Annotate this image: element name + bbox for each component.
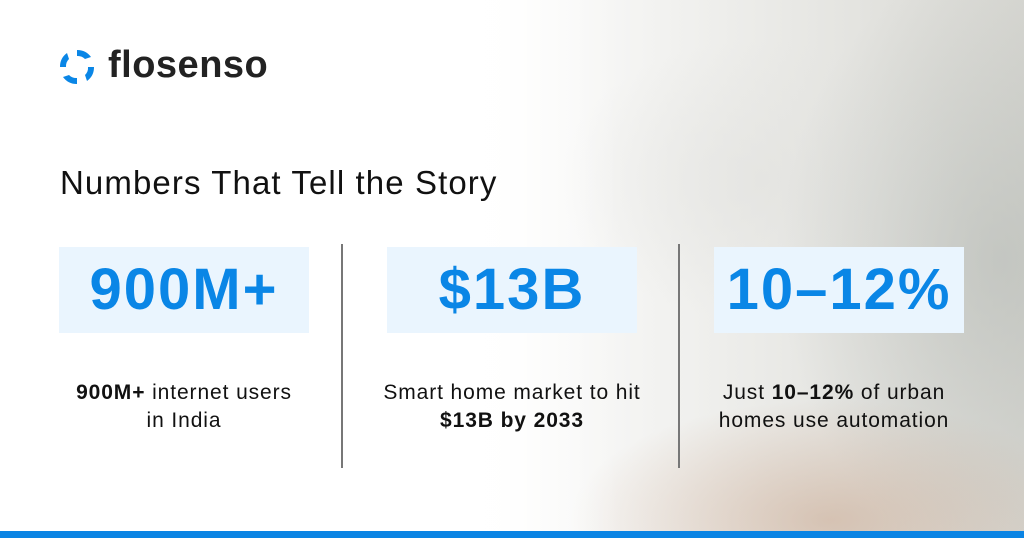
stat 3: [714, 247, 964, 432]
title: Numbers That Tell the Story: [60, 164, 498, 201]
text: Just 10–12% of urban: [723, 381, 945, 404]
text: 10–12%: [727, 257, 951, 322]
icon: logo mark: [60, 50, 94, 84]
text: $13B: [439, 257, 585, 322]
logo: flosenso: [108, 44, 268, 86]
stat 2: [383, 247, 641, 432]
text: 900M+: [90, 257, 278, 322]
bottom bar: [0, 531, 1024, 538]
text: 900M+ internet users: [76, 381, 292, 404]
text: Smart home market to hit: [383, 381, 641, 404]
text: homes use automation: [719, 409, 949, 432]
text: $13B by 2033: [440, 409, 584, 432]
stat 1: [59, 247, 309, 432]
text: in India: [147, 409, 221, 432]
